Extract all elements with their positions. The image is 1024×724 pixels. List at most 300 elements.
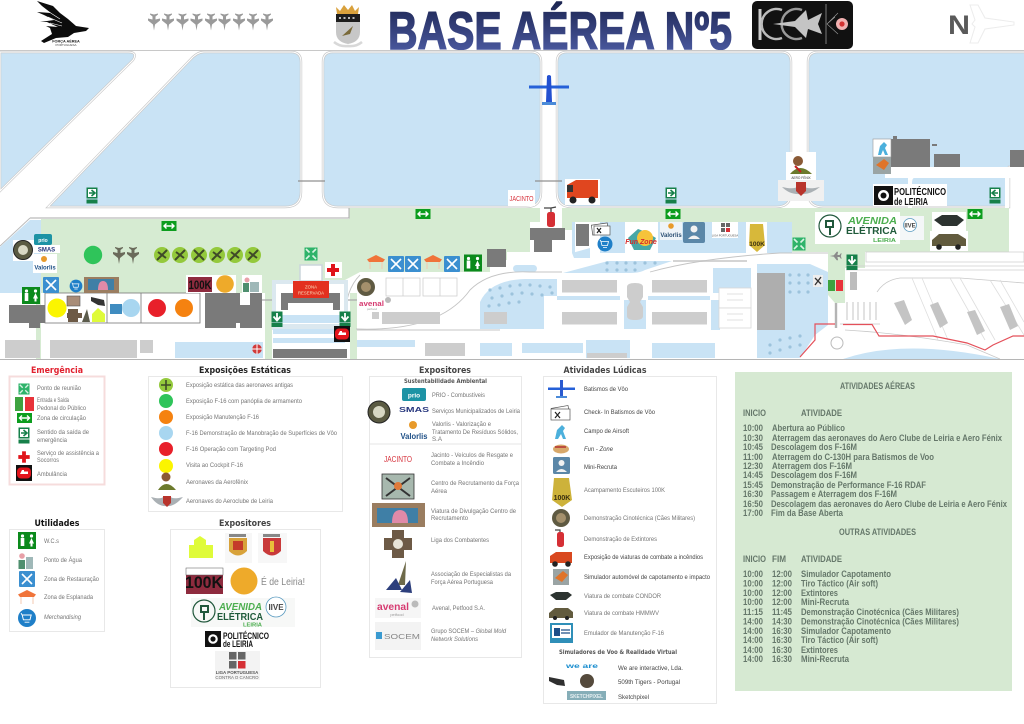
icon: yellow building <box>92 308 105 322</box>
panel: Exposições Estáticas: Visita ao Cockpit F-16 <box>186 462 243 469</box>
panel: Atividades Lúdicas: Viatura de combate HMMWV <box>584 610 660 617</box>
zona reservada sign: ZONA <box>305 284 317 290</box>
icon: fire truck <box>565 179 600 205</box>
panel: Utilidades: Zona de Esplanada <box>44 594 93 601</box>
logo: Politecnico: de LEIRIA <box>223 639 253 649</box>
icon: targeting pod <box>148 299 166 317</box>
subheading: simulators: Simuladores de Voo & Realidade Virtual <box>559 648 677 656</box>
logo: avenal: avenal <box>359 299 384 308</box>
logo: prio <box>34 234 52 245</box>
panel: Expositores (centre): Tratamento De Resíduos Sólidos, <box>432 429 518 436</box>
panel: Expositores (centre): Valorlis - Valorização e <box>432 421 491 428</box>
panel: Expositores (left) <box>170 519 320 688</box>
logo: Politecnico de Leiria <box>873 184 947 208</box>
logo: Valorlis second <box>660 222 682 240</box>
icon: condor <box>550 592 572 600</box>
logo: Politecnico <box>205 631 269 649</box>
panel: Atividades Lúdicas: Exposição de viaturas de combate a incêndios <box>584 554 704 561</box>
panel: Atividades Lúdicas: Simulador automóvel de capotamento e impacto <box>584 574 710 581</box>
logo: recruitment centre <box>382 474 414 499</box>
other activities table: Extintores <box>801 588 838 598</box>
icon: circulation zone <box>17 413 32 423</box>
heading: Exposições Estáticas: Exposições Estáticas <box>199 366 291 376</box>
logo: prio <box>402 388 426 401</box>
logo: Jacinto: JACINTO <box>384 454 412 464</box>
icon: water point <box>242 275 262 293</box>
icon: airsoft field <box>873 139 891 157</box>
icon: condor vehicle <box>932 212 966 231</box>
legend box <box>148 376 342 512</box>
logo: liga cancro <box>712 222 738 238</box>
panel: Emergência: Sentido da saída de <box>37 429 89 436</box>
heading: Emergência: Emergência <box>31 365 83 376</box>
icon: north indicator: N <box>948 10 970 40</box>
logo: gold badge <box>214 275 236 293</box>
icon: cockpit visit yellow <box>48 298 66 318</box>
logo: Politecnico de Leiria: de LEIRIA <box>894 197 928 208</box>
panel: Expositores (centre) <box>368 366 522 658</box>
other activities table: 14:00 <box>743 616 763 626</box>
logo: Avenida Eletrica <box>815 212 900 244</box>
icon: row of nine F-16 silhouettes <box>148 14 273 30</box>
panel: Emergência: Ponto de reunião <box>37 385 81 392</box>
panel: Emergência: emergência <box>37 437 67 444</box>
icon: ambulance <box>334 326 350 342</box>
panel: Emergência: Serviço de assistência a <box>37 450 99 457</box>
panel: Atividades Lúdicas: Batismos de Vôo <box>584 386 628 393</box>
panel: dark buildings <box>9 136 1024 358</box>
map <box>0 50 1024 360</box>
icon: aerofenix <box>158 472 176 490</box>
icon: blue C-130 aircraft <box>529 75 569 105</box>
icon: mini recruit <box>683 222 705 243</box>
other activities table: Tiro Táctico (Air soft) <box>801 578 878 588</box>
panel: Atividades Lúdicas: Sketchpixel <box>618 694 649 701</box>
panel: Exposições Estáticas: Exposição F-16 com panóplia de armamento <box>186 398 302 405</box>
icon: maintenance <box>159 410 173 424</box>
other activities table: 14:00 <box>743 654 763 664</box>
icon: rollover simulator <box>553 569 569 585</box>
logo: Jacinto <box>508 190 535 206</box>
other activities table: Simulador Capotamento <box>801 626 891 636</box>
logo: SMAS <box>33 245 60 254</box>
air activities table: 10:45 <box>743 442 763 452</box>
parking bays <box>847 302 876 320</box>
other activities table: 12:00 <box>772 578 792 588</box>
icon: coat of arms 1 <box>225 533 252 563</box>
icon: maintenance <box>175 299 193 317</box>
icon: WC <box>18 532 36 549</box>
other activities table: Mini-Recruta <box>801 597 850 607</box>
icon: tickets <box>551 406 570 420</box>
icon: olive aircraft circles <box>154 247 261 263</box>
logo: we are: we are <box>564 663 599 670</box>
logo: prio: prio <box>408 392 420 400</box>
icon: F-16 control surfaces <box>122 299 140 317</box>
strips between blocks <box>175 264 1000 359</box>
zona reservada sign: RESERVADA <box>298 290 324 296</box>
panel: Expositores (centre): Força Aérea Portuguesa <box>431 579 493 586</box>
panel: Expositores (centre): Liga dos Combatentes <box>431 537 490 544</box>
light grey buildings <box>5 280 707 358</box>
other activities table: 16:30 <box>772 645 792 655</box>
panel: Exposições Estáticas: F-16 Demonstração de Manobração de Superfícies de Vôo <box>186 430 337 437</box>
grid blocks <box>719 288 751 328</box>
logo: Politecnico: POLITÉCNICO <box>223 631 269 641</box>
icon: 100K camp: 100K <box>749 241 765 248</box>
panel: Expositores (centre): Jacinto - Veículos de Resgate e <box>431 452 513 459</box>
icon: ambulance legend <box>16 465 32 481</box>
heading: Expositores: Expositores <box>419 366 471 376</box>
other activities table: 10:00 <box>743 588 763 598</box>
panel: apron blue areas <box>0 52 1024 208</box>
panel: Expositores (centre): PRIO - Combustíveis <box>432 392 486 399</box>
other activities table: INICIO <box>743 554 766 564</box>
panel: Atividades Lúdicas: Mini-Recruta <box>584 464 617 471</box>
icon: entrance markers <box>813 252 843 291</box>
logo: Avenida Eletrica: AVENIDA <box>218 602 262 613</box>
icon: pedestrian entrance <box>15 397 34 411</box>
other activities table: 11:45 <box>772 607 792 617</box>
icon: assembly point <box>18 383 30 395</box>
icon: recruitment centre <box>67 296 80 306</box>
air activities table: ATIVIDADE <box>801 408 842 418</box>
panel: Emergência: Zona de circulação <box>37 415 86 422</box>
icon: cinotecnic <box>552 509 570 527</box>
panel: Utilidades <box>10 519 104 632</box>
icon: first aid <box>18 451 30 463</box>
panel: Expositores (centre): Aérea <box>431 488 447 495</box>
panel: Exposições Estáticas: Aeronaves da Aerofênix <box>186 479 249 486</box>
panel: Exposições Estáticas: Exposição estática das aeronaves antigas <box>186 382 294 389</box>
icon: left food & WC cluster <box>22 277 82 304</box>
panel: Expositores (centre): Combate a Incêndio <box>431 460 484 467</box>
box <box>170 530 320 688</box>
logo: 100K <box>186 275 214 293</box>
panel: Exposições Estáticas <box>148 366 342 512</box>
header band <box>0 0 1024 61</box>
icon: fire truck <box>550 552 572 567</box>
air activities table: Fim da Base Aberta <box>771 508 844 518</box>
panel: schedule <box>735 372 1012 691</box>
panel: Utilidades: Merchandising <box>44 614 81 621</box>
logo: cinotecnic circle <box>357 278 375 296</box>
other activities table: 14:30 <box>772 616 792 626</box>
air activities table: Aterragem do C-130H para Batismos de Voo <box>772 452 934 462</box>
icon: hmmwv vehicle <box>930 231 968 251</box>
icon: fire extinguisher <box>544 207 556 227</box>
icon: coat of arms 2 <box>258 533 287 563</box>
air activities table <box>743 408 1007 518</box>
logo: Avenida Eletrica: LEIRIA <box>243 622 262 628</box>
panel: Atividades Lúdicas: Campo de Airsoft <box>584 428 629 435</box>
icon: check-in tickets <box>591 223 610 235</box>
air activities table: 11:00 <box>743 452 763 462</box>
other activities table: 14:00 <box>743 635 763 645</box>
air activities table: Passagem e Aterragem dos F-16M <box>771 489 897 499</box>
air activities table: 17:00 <box>743 508 763 518</box>
air activities table: 10:30 <box>743 433 763 443</box>
logo: Valorlis second: Valorlis <box>660 233 682 239</box>
legend box <box>10 530 104 632</box>
air activities table: Descolagem dos F-16M <box>771 442 857 452</box>
other activities table: Demonstração Cinotécnica (Cães Militares) <box>801 607 959 617</box>
air activities table: 10:00 <box>743 423 763 433</box>
logo: Liga Portuguesa Contra o Cancro: CONTRA O CANCRO <box>215 675 259 680</box>
logo: Valorlis: Valorlis <box>400 432 428 441</box>
other activities table: 10:00 <box>743 597 763 607</box>
panel: Exposições Estáticas: Exposição Manutenção F-16 <box>186 414 259 421</box>
logo: avenal <box>375 598 421 618</box>
title: BASE AÉREA Nº5 <box>388 1 732 61</box>
logo: Valorlis <box>400 421 428 441</box>
icon: 100 years black logo <box>752 1 853 49</box>
icon: VR glasses <box>549 677 565 686</box>
logo: Aero Fenix <box>786 152 816 180</box>
logo: Sketchpixel: SKETCHPIXEL <box>570 694 604 700</box>
logo: Aeroclube de Leiria <box>778 180 824 201</box>
icon: cockpit <box>159 459 173 473</box>
icon: extinguisher <box>555 530 564 547</box>
logo: avenal: petfood <box>367 307 377 311</box>
icon: control surfaces <box>159 426 173 440</box>
panel: pavilion row <box>45 293 200 323</box>
logo: Fun Zone: Fun Zone <box>625 239 657 246</box>
icon: 100K camp <box>746 222 767 253</box>
central parking pool <box>480 279 557 329</box>
icon: emulator <box>550 623 573 643</box>
air activities table: 14:45 <box>743 470 763 480</box>
panel: Exposições Estáticas: F-16 Operação com Targeting Pod <box>186 446 276 453</box>
panel: Atividades Lúdicas: Demonstração de Extintores <box>584 536 658 543</box>
logo: Valorlis <box>33 254 57 273</box>
icon: terrace <box>18 590 36 604</box>
logo: avenal: petfood <box>390 612 404 617</box>
other activities table: 14:00 <box>743 645 763 655</box>
panel: Atividades Lúdicas: Check- In Batismos de Vôo <box>584 409 655 416</box>
icon: 100K camp: 100K <box>554 495 570 502</box>
logo: Avenida Eletrica <box>191 597 295 628</box>
panel: Atividades Lúdicas: 509th Tigers - Portugal <box>618 679 680 686</box>
icon: exit direction <box>18 428 30 444</box>
other activities table: Demonstração Cinotécnica (Cães Militares) <box>801 616 959 626</box>
panel: Expositores (centre): Grupo SOCEM – Global Mold <box>431 628 506 635</box>
other activities table: 16:30 <box>772 654 792 664</box>
icon: 100K camp <box>552 478 572 507</box>
logo: Liga dos Combatentes <box>384 530 412 558</box>
panel: Utilidades: Zona de Restauração <box>44 576 99 583</box>
air activities table: 16:50 <box>743 499 763 509</box>
icon: mini recruit <box>553 457 570 474</box>
icon: north indicator <box>948 5 1014 43</box>
panel: Emergência <box>10 365 104 484</box>
panel: Emergência: Pedonal do Público <box>37 405 86 412</box>
panel: green public zone <box>0 208 1009 359</box>
panel: Atividades Lúdicas: Fun - Zone <box>584 446 613 453</box>
icon: aeroclube <box>151 496 183 507</box>
other activities table <box>743 554 959 664</box>
logo: SMAS: SMAS <box>399 407 429 414</box>
panel: roads and lower blue lots <box>5 252 1024 359</box>
blue lot dots <box>487 261 810 355</box>
icon: liga cross <box>67 309 82 322</box>
upper strip <box>563 261 672 273</box>
logo: IVE <box>900 216 924 240</box>
logo: Avenida Eletrica: IIVE <box>268 603 284 612</box>
icon: air force eagle logo: PORTUGUESA <box>56 43 76 47</box>
logo: 509th Tigers <box>580 674 594 688</box>
panel: Expositores (centre): Associação de Especialistas da <box>431 571 511 578</box>
box <box>544 376 716 704</box>
logo: Fun Zone <box>625 229 657 250</box>
other activities table: 11:15 <box>743 607 763 617</box>
icon: antique aircraft jets <box>113 247 139 264</box>
logo: Liga Portuguesa Contra o Cancro <box>215 651 260 680</box>
air activities table: INICIO <box>743 408 766 418</box>
logo: Avenida Eletrica: AVENIDA <box>847 216 897 227</box>
icon: fun zone <box>553 444 569 454</box>
small pond <box>513 265 537 272</box>
logo: gold badge <box>230 568 258 594</box>
icon: recruitment van <box>372 503 425 527</box>
logo: IVE: IIVE <box>904 224 916 230</box>
other activities table: 14:00 <box>743 626 763 636</box>
icon: hmmwv <box>549 608 573 620</box>
other activities table: Extintores <box>801 645 838 655</box>
panel: Atividades Lúdicas: Emulador de Manutenção F-16 <box>584 630 664 637</box>
logo: SOCEM: SOCEM <box>384 632 420 641</box>
panel: Atividades Lúdicas: We are interactive, Lda. <box>618 665 683 672</box>
icon: air force eagle logo <box>37 1 89 47</box>
box <box>370 376 522 658</box>
logo: SMAS seal <box>368 401 390 423</box>
icon: VR glasses <box>91 297 105 306</box>
logo: SOCEM <box>375 622 421 650</box>
icon: water point <box>18 553 33 569</box>
emergency route arrows <box>86 188 1000 327</box>
panel: Expositores (centre): Recrutamento <box>431 515 468 522</box>
heading: Atividades Aéreas: ATIVIDADES AÉREAS <box>840 381 915 391</box>
text: É de Leiria: É de Leiria! <box>261 575 305 588</box>
logo: liga cancro: LIGA PORTUGUESA <box>712 234 738 238</box>
panel: zona reservada compound <box>262 265 357 343</box>
logo: Avenida Eletrica: ELÉTRICA <box>217 610 263 623</box>
panel: Exposições Estáticas: Aeronaves do Aeroclube de Leiria <box>186 498 273 505</box>
other activities table: 10:00 <box>743 569 763 579</box>
logo: avenal <box>359 297 391 311</box>
logo: 100K: 100K <box>185 573 224 592</box>
icon: merchandising <box>18 609 36 627</box>
icon: food zone <box>19 571 35 587</box>
logo: Jacinto: JACINTO <box>510 194 534 203</box>
panel: Expositores (centre): Network Solutions <box>431 636 479 643</box>
logo: 100K: 100K <box>188 280 212 292</box>
logo: SMAS seal <box>13 240 34 261</box>
icon: first aid cross <box>325 262 342 278</box>
icon: antique aircraft <box>159 378 173 392</box>
panel: Atividades Lúdicas: Demonstração Cinotécnica (Cães Militares) <box>584 515 695 522</box>
heading: Utilidades: Utilidades <box>34 519 80 529</box>
panel: Utilidades: Ponto de Água <box>44 555 82 564</box>
logo: Valorlis: Valorlis <box>34 266 56 272</box>
icon: yellow building <box>189 536 213 558</box>
air activities table: 12:30 <box>743 461 763 471</box>
air activities table: Demonstração de Performance F-16 RDAF <box>771 480 926 490</box>
other activities table: 12:00 <box>772 569 792 579</box>
icon: targeting pod <box>159 442 173 456</box>
other activities table: Simulador Capotamento <box>801 569 891 579</box>
other activities table: 10:00 <box>743 578 763 588</box>
logo: Aero Fenix: AERO FÉNIX <box>791 175 812 180</box>
subheading: Sustentabilidade Ambiental <box>404 377 487 385</box>
icon: association <box>82 309 90 322</box>
panel: Expositores (centre): Viatura de Divulgação Centro de <box>431 508 516 515</box>
logo: Sketchpixel <box>567 691 606 700</box>
heading: Atividades Lúdicas: Atividades Lúdicas <box>564 366 646 376</box>
other activities table: Tiro Táctico (Air soft) <box>801 635 878 645</box>
air activities table: 16:30 <box>743 489 763 499</box>
panel: Emergência: Ambulância <box>37 471 67 478</box>
heading: Outras Atividades: OUTRAS ATIVIDADES <box>839 527 916 537</box>
icon: emulator <box>110 304 122 314</box>
air activities table: Abertura ao Público <box>772 423 845 433</box>
football courts <box>386 278 457 296</box>
icon: base coat of arms <box>334 5 362 46</box>
other activities table: 12:00 <box>772 588 792 598</box>
icon: recruitment van <box>84 277 119 293</box>
icon: blue aircraft <box>548 380 575 398</box>
panel: Emergência: Socorros <box>37 457 60 464</box>
other activities table: 16:30 <box>772 635 792 645</box>
panel: Atividades Lúdicas: Viatura de combate CONDOR <box>584 593 661 600</box>
logo: specialists association <box>386 561 412 593</box>
panel: Emergência: Entrada e Saída <box>37 397 69 404</box>
panel: Atividades Lúdicas <box>544 366 716 704</box>
air activities table: Aterragem dos F-16M <box>772 461 852 471</box>
zona reservada sign <box>293 281 329 298</box>
icon: armament <box>159 394 173 408</box>
panel: Expositores (centre): Centro de Recrutamento da Força <box>431 480 519 487</box>
logo: prio: prio <box>38 238 48 244</box>
logo: Avenida Eletrica: LEIRIA <box>873 238 896 244</box>
heading: Expositores: Expositores <box>219 519 271 529</box>
icons: restaurants row <box>367 254 482 272</box>
logo: Liga Portuguesa Contra o Cancro: LIGA PORTUGUESA <box>216 670 259 675</box>
icon: airsoft <box>555 425 566 439</box>
other activities table: 12:00 <box>772 597 792 607</box>
logo: avenal: avenal <box>377 602 409 613</box>
icon: air force eagle logo: FORÇA AÉREA <box>52 38 80 44</box>
logo: SMAS: SMAS <box>38 248 55 254</box>
panel: Expositores (centre): Avenal, Petfood S.A. <box>432 605 485 612</box>
air activities table: Descolagem dos F-16M <box>771 470 857 480</box>
road lines <box>345 253 828 330</box>
panel: Expositores (centre): Serviços Municipalizados de Leiria <box>432 408 520 415</box>
panel: Utilidades: W.C.s <box>44 538 60 545</box>
legend box <box>10 376 104 484</box>
logo: Politecnico de Leiria: POLITÉCNICO <box>894 185 946 198</box>
other activities table: Mini-Recruta <box>801 654 850 664</box>
air activities table: 15:45 <box>743 480 763 490</box>
other activities table: ATIVIDADE <box>801 554 842 564</box>
icon: rollover simulator <box>873 157 891 174</box>
logo: Avenida Eletrica: ELÉTRICA <box>846 224 897 237</box>
emergency red route <box>800 324 1024 357</box>
other activities table: 16:30 <box>772 626 792 636</box>
panel: Atividades Lúdicas: Acampamento Escuteiros 100K <box>584 487 666 494</box>
other activities table: FIM <box>772 554 786 564</box>
panel: Expositores (centre): S.A <box>432 436 443 443</box>
